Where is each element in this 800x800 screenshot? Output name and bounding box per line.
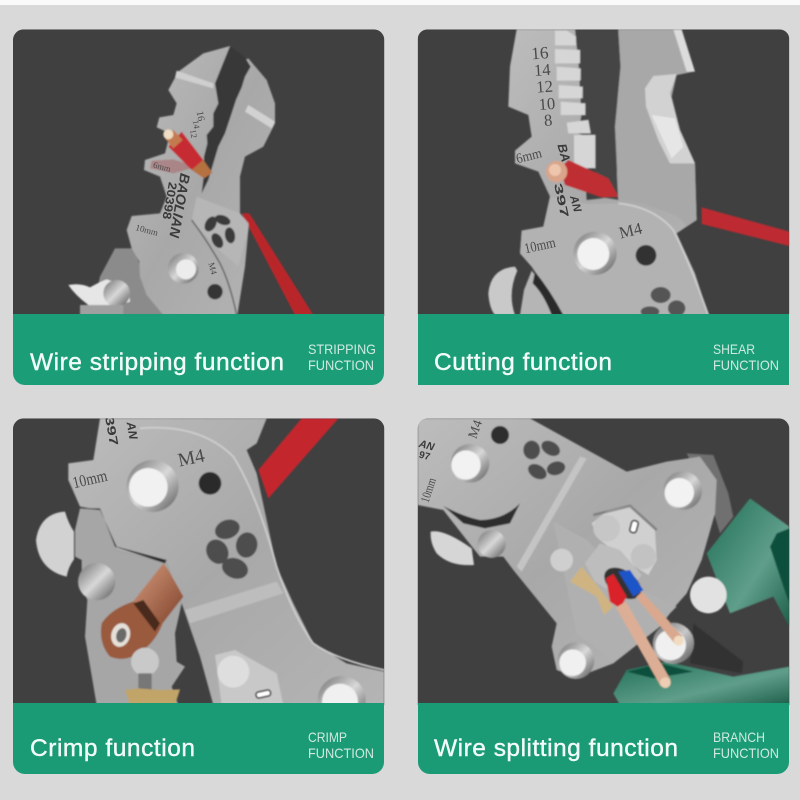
engraved markings bbox=[73, 418, 205, 488]
panel: cutting bbox=[418, 29, 789, 385]
label bar bbox=[13, 703, 384, 774]
caption: stripping function bbox=[308, 341, 376, 373]
panel: wire stripping bbox=[13, 29, 384, 385]
caption: shear function: FUNCTION bbox=[713, 357, 779, 373]
caption: crimp function: CRIMP bbox=[308, 729, 347, 745]
engraved markings: BAOLIAN bbox=[166, 172, 193, 240]
engraved markings: 10mm bbox=[418, 476, 439, 504]
engraved markings: AN bbox=[417, 438, 436, 454]
engraved markings: 14 bbox=[191, 119, 202, 130]
engraved markings: 10 bbox=[538, 94, 556, 114]
panel: crimp bbox=[13, 415, 384, 774]
caption: stripping function: STRIPPING bbox=[308, 341, 376, 357]
engraved markings: AN bbox=[567, 193, 583, 214]
photo: pliers splitting wires bbox=[417, 418, 789, 705]
caption: stripping function: FUNCTION bbox=[308, 357, 374, 373]
engraved markings: M4 bbox=[617, 218, 645, 243]
engraved markings bbox=[418, 420, 482, 502]
engraved markings: 12 bbox=[188, 129, 199, 139]
caption: shear function bbox=[713, 341, 779, 373]
panel: wire splitting bbox=[417, 418, 789, 774]
engraved markings: 16 bbox=[531, 43, 550, 63]
label bar bbox=[418, 314, 789, 385]
engraved markings: 8 bbox=[543, 110, 553, 130]
heading: wire stripping function: Wire stripping function bbox=[30, 349, 284, 376]
engraved markings: M4 bbox=[176, 445, 207, 472]
photo: pliers cutting a wire bbox=[418, 29, 789, 317]
photo: pliers stripping a wire bbox=[13, 29, 384, 316]
top white strip bbox=[0, 0, 800, 5]
engraved markings: AN bbox=[124, 420, 141, 441]
caption: branch function bbox=[713, 729, 779, 761]
engraved markings: 397 bbox=[551, 182, 570, 219]
engraved markings: 20398 bbox=[159, 181, 180, 221]
label bar bbox=[418, 703, 789, 774]
engraved markings: 6mm bbox=[152, 160, 172, 174]
photo: pliers crimping a terminal bbox=[13, 415, 384, 724]
engraved markings: M4 bbox=[465, 418, 485, 440]
engraved markings: 10mm bbox=[523, 235, 558, 257]
caption: branch function: FUNCTION bbox=[713, 745, 779, 761]
engraved markings: 12 bbox=[536, 77, 554, 97]
heading: cutting function: Cutting function bbox=[434, 349, 612, 376]
engraved markings: 6mm bbox=[515, 146, 544, 167]
engraved markings: 10mm bbox=[134, 222, 159, 238]
engraved markings: 14 bbox=[533, 60, 552, 80]
caption: branch function: BRANCH bbox=[713, 729, 765, 745]
label bar bbox=[13, 314, 384, 385]
engraved markings: 397 bbox=[102, 415, 121, 447]
engraved markings bbox=[515, 43, 645, 257]
engraved markings: M4 bbox=[206, 261, 219, 276]
engraved markings bbox=[134, 110, 219, 276]
engraved markings: 97 bbox=[418, 450, 432, 463]
heading: wire splitting function: Wire splitting function bbox=[434, 735, 678, 762]
engraved markings: 16 bbox=[194, 110, 206, 122]
heading: crimp function: Crimp function bbox=[30, 735, 195, 762]
engraved markings: BA bbox=[554, 142, 573, 163]
caption: crimp function bbox=[308, 729, 374, 761]
caption: crimp function: FUNCTION bbox=[308, 745, 374, 761]
engraved markings: 10mm bbox=[71, 466, 109, 492]
caption: shear function: SHEAR bbox=[713, 341, 755, 357]
